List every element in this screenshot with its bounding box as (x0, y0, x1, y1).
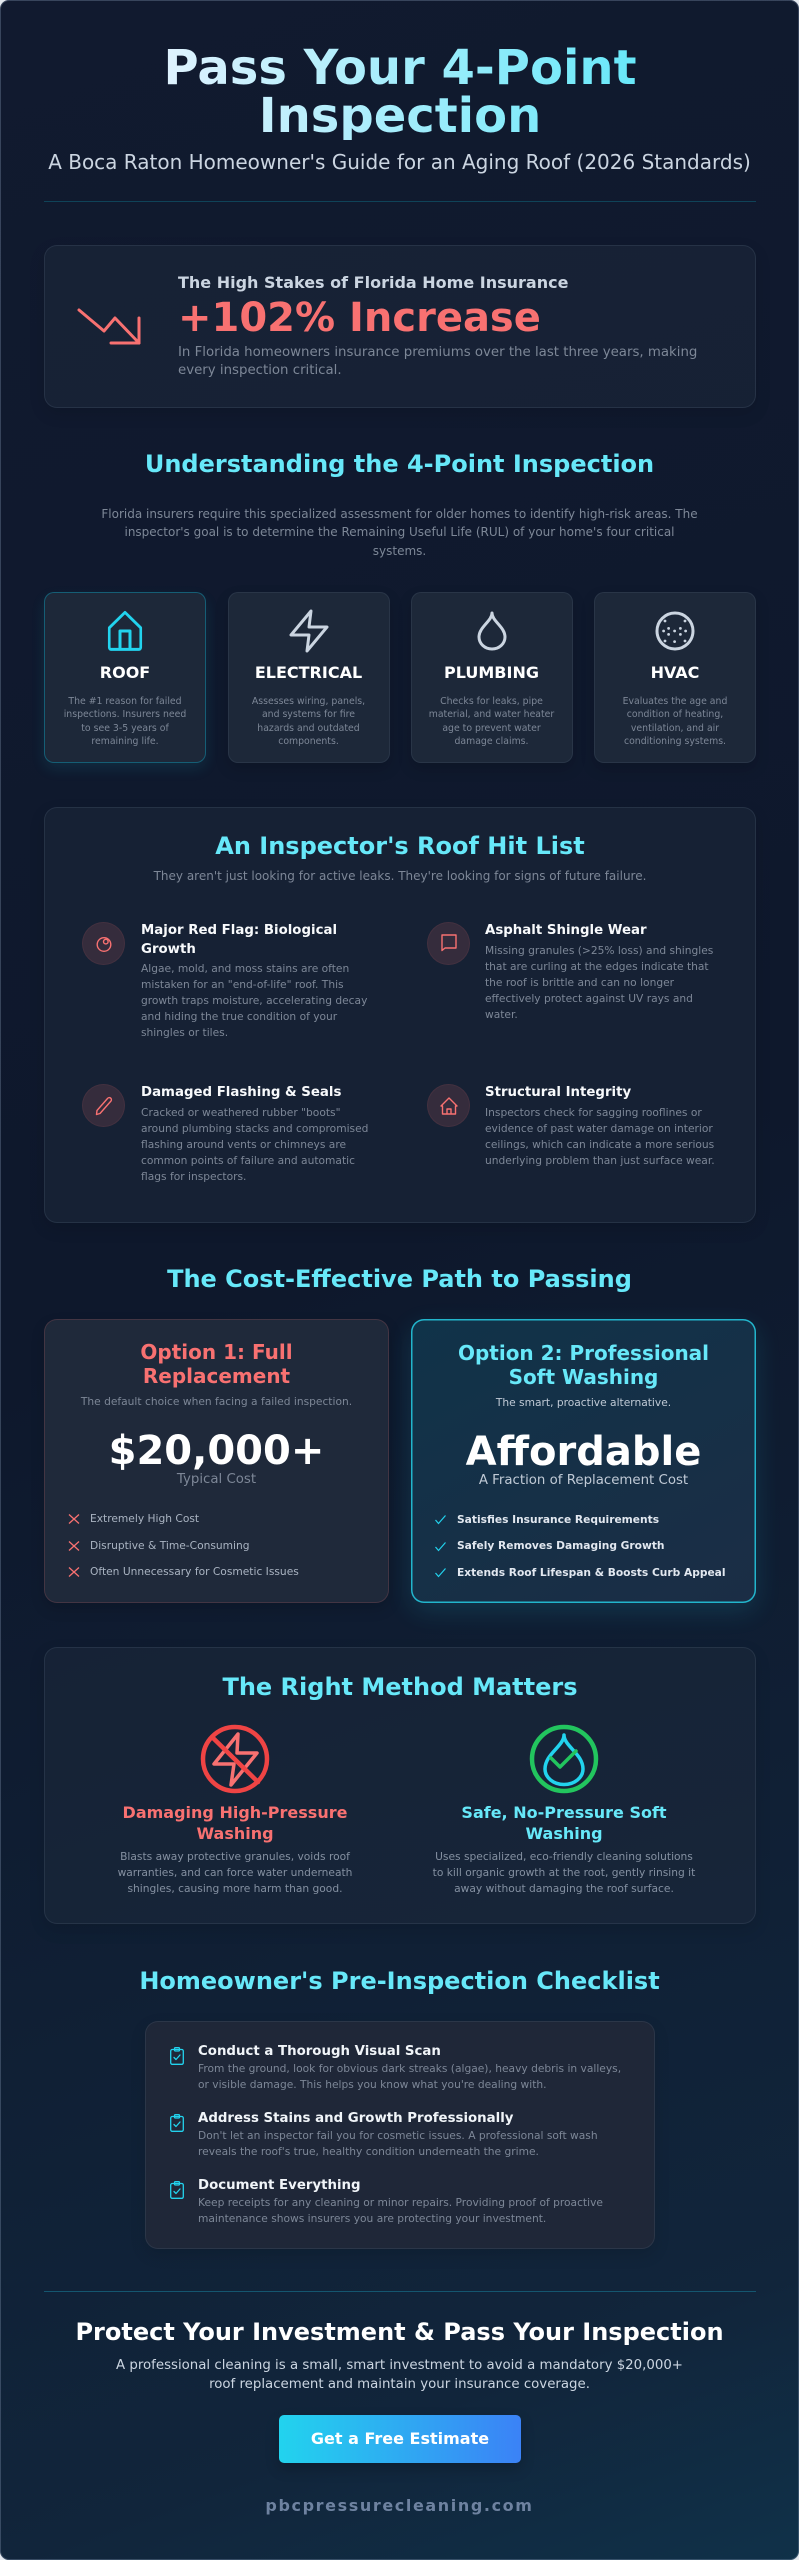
icon: water drop (478, 612, 506, 650)
icon: no high pressure (200, 1724, 270, 1794)
benefit 1: Satisfies Insurance Requirements (457, 1513, 659, 1526)
panel: checklist (144, 2021, 655, 2248)
title: Pass Your 4-Point (163, 40, 637, 96)
price caption: A Fraction of Replacement Cost (479, 1473, 688, 1488)
item description: water. (485, 1008, 518, 1021)
stat number: +102% Increase (178, 295, 541, 341)
item description (141, 1106, 368, 1183)
icon: bolt (289, 610, 329, 652)
option title: Replacement (143, 1364, 290, 1388)
icon: pencil (82, 1084, 125, 1127)
item description (485, 944, 713, 1021)
stat description (178, 345, 697, 378)
item title: Asphalt Shingle Wear (485, 923, 647, 938)
method: high pressure (118, 1724, 352, 1895)
item: flashing and seals (82, 1084, 368, 1183)
option subtitle: The default choice when facing a failed inspection. (81, 1395, 352, 1408)
item description: that are curling at the edges indicate that (485, 960, 709, 973)
icon: clipboard (170, 2047, 184, 2065)
item description (485, 1106, 715, 1167)
list: benefits (435, 1513, 726, 1579)
item description: flashing around vents or chimneys are (141, 1138, 346, 1151)
item description: Cracked or weathered rubber "boots" (141, 1106, 340, 1119)
check description (198, 2195, 603, 2227)
panel: option 1 (44, 1319, 389, 1603)
card: hvac (594, 592, 756, 763)
method title: Safe, No-Pressure Soft (461, 1802, 667, 1822)
benefit 2: Safely Removes Damaging Growth (457, 1539, 665, 1552)
intro paragraph: inspector's goal is to determine the Remaining Useful Life (RUL) of your home's four critical (124, 525, 675, 539)
description (252, 696, 365, 747)
icon: house (108, 610, 142, 651)
description: hazards and outdated (257, 723, 360, 734)
description: remaining life. (91, 736, 159, 747)
panel: right method (44, 1647, 756, 1924)
check description: Keep receipts for any cleaning or minor repairs. Providing proof of proactive (198, 2196, 603, 2209)
item: shingle wear (427, 922, 713, 1021)
item title (141, 923, 337, 957)
method description (432, 1850, 696, 1895)
heading: checklist: Homeowner's Pre-Inspection Checklist (139, 1967, 660, 1995)
closing heading: Protect Your Investment & Pass Your Inspection (75, 2318, 724, 2346)
heading: cost path: The Cost-Effective Path to Passing (167, 1265, 632, 1293)
price: Affordable (466, 1429, 701, 1475)
item description: Inspectors check for sagging rooflines or (485, 1106, 702, 1119)
item title: Major Red Flag: Biological (141, 923, 337, 938)
check title: Address Stains and Growth Professionally (198, 2111, 514, 2126)
check title: Conduct a Thorough Visual Scan (198, 2044, 441, 2059)
method title: Washing (196, 1824, 274, 1843)
heading: An Inspector's Roof Hit List (215, 832, 585, 860)
icon: vent (656, 612, 694, 650)
description: and systems for fire (262, 709, 355, 720)
stat heading: The High Stakes of Florida Home Insurance (178, 272, 568, 292)
method description: Blasts away protective granules, voids roof (120, 1850, 350, 1863)
subheading: They aren't just looking for active leaks. They're looking for signs of future failure. (154, 869, 646, 883)
icon: growth spot (82, 922, 125, 965)
closing text: A professional cleaning is a small, smart investment to avoid a mandatory $20,000+ (116, 2358, 683, 2373)
card: electrical (228, 592, 390, 763)
four system cards (43, 592, 756, 770)
check item 2 (170, 2111, 640, 2161)
title: Inspection (259, 88, 541, 144)
heading: understanding: Understanding the 4-Point Inspection (145, 450, 654, 478)
check description: From the ground, look for obvious dark streaks (algae), heavy debris in valleys, (198, 2062, 621, 2075)
method description (118, 1850, 352, 1895)
check item 1 (170, 2044, 621, 2091)
item title: Structural Integrity (485, 1085, 631, 1100)
downside 3: Often Unnecessary for Cosmetic Issues (90, 1565, 299, 1578)
card: roof (44, 592, 206, 763)
description: The #1 reason for failed (68, 696, 182, 707)
icon: clipboard (170, 2114, 184, 2132)
item description: the roof is brittle and can no longer (485, 976, 674, 989)
item description: effectively protect against UV rays and (485, 992, 693, 1005)
option title: Option 1: Full (140, 1340, 293, 1364)
description: Checks for leaks, pipe (440, 696, 543, 707)
label: PLUMBING (444, 662, 539, 682)
item description: growth traps moisture, accelerating decay (141, 994, 367, 1007)
item description: mistaken for an "end-of-life" roof. This (141, 978, 344, 991)
item title: Damaged Flashing & Seals (141, 1085, 341, 1100)
card: plumbing (410, 592, 572, 763)
check description (198, 2061, 621, 2093)
method description: to kill organic growth at the root, gently rinsing it (433, 1866, 695, 1879)
website footer: pbcpressurecleaning.com (265, 2496, 534, 2514)
label: HVAC (651, 662, 699, 682)
description: inspections. Insurers need (64, 709, 186, 720)
icon: safe drop (530, 1724, 598, 1794)
icon: shingle square (427, 922, 470, 965)
panel: insurance stat (44, 245, 756, 408)
intro paragraph: systems. (373, 544, 426, 558)
closing text (0, 2357, 799, 2394)
item description (141, 962, 367, 1039)
icon: small house (427, 1084, 470, 1127)
item description: shingles or tiles. (141, 1026, 228, 1039)
stat description: every inspection critical. (178, 363, 342, 378)
item description: underlying problem than just surface wear. (485, 1154, 715, 1167)
price: $20,000+ (109, 1428, 324, 1474)
method title: Damaging High-Pressure (123, 1802, 347, 1822)
item description: and hiding the true condition of your (141, 1010, 337, 1023)
description: to see 3-5 years of (81, 723, 169, 734)
label: ROOF (100, 662, 150, 682)
method title (461, 1802, 667, 1843)
description: damage claims. (454, 736, 528, 747)
closing text: roof replacement and maintain your insurance coverage. (209, 2377, 590, 2392)
check description: reveals the roof's true, healthy condition underneath the grime. (198, 2145, 539, 2158)
price caption: Typical Cost (177, 1472, 256, 1487)
check item 3 (170, 2177, 640, 2227)
description: Assesses wiring, panels, (252, 696, 365, 707)
downside 1: Extremely High Cost (90, 1512, 199, 1525)
description: conditioning systems. (624, 736, 726, 747)
option title: Soft Washing (509, 1365, 658, 1389)
method description: shingles, causing more harm than good. (128, 1882, 342, 1895)
downside 2: Disruptive & Time-Consuming (90, 1539, 250, 1552)
method title (123, 1802, 347, 1843)
description: ventilation, and air (631, 723, 719, 734)
item: structural integrity (427, 1084, 715, 1167)
list: downsides (68, 1512, 299, 1578)
panel: option 2 (411, 1319, 756, 1603)
item title: Growth (141, 942, 196, 957)
button: free estimate (279, 2415, 521, 2463)
heading: The Right Method Matters (222, 1673, 578, 1701)
description: condition of heating, (627, 709, 723, 720)
description: Evaluates the age and (623, 696, 727, 707)
check description: maintenance shows insurers you are protecting your investment. (198, 2212, 546, 2225)
option subtitle: The smart, proactive alternative. (496, 1396, 671, 1409)
item description: Missing granules (>25% loss) and shingles (485, 944, 713, 957)
check description: Don't let an inspector fail you for cosmetic issues. A professional soft wash (198, 2129, 598, 2142)
method: soft wash (432, 1724, 696, 1895)
item description: common points of failure and automatic (141, 1154, 355, 1167)
method title: Washing (525, 1824, 603, 1843)
description (429, 696, 554, 747)
intro paragraph (101, 507, 698, 558)
check description: or visible damage. This helps you know what you're dealing with. (198, 2078, 547, 2091)
description: material, and water heater (429, 709, 554, 720)
description (64, 696, 186, 747)
intro paragraph: Florida insurers require this specialized assessment for older homes to identify high-risk areas. The (101, 507, 698, 521)
item description: flags for inspectors. (141, 1170, 246, 1183)
description: components. (278, 736, 339, 747)
check title: Document Everything (198, 2178, 361, 2193)
option title: Option 2: Professional (458, 1341, 709, 1365)
benefit 3: Extends Roof Lifespan & Boosts Curb Appeal (457, 1566, 726, 1579)
item description: ceilings, which can indicate a more serious (485, 1138, 714, 1151)
method description: Uses specialized, eco-friendly cleaning solutions (435, 1850, 693, 1863)
item description: Algae, mold, and moss stains are often (141, 962, 349, 975)
icon: trending down arrow (77, 308, 141, 345)
description (623, 696, 727, 747)
stat description: In Florida homeowners insurance premiums over the last three years, making (178, 345, 697, 360)
option title (140, 1340, 293, 1388)
item description: evidence of past water damage on interior (485, 1122, 713, 1135)
title (160, 44, 640, 140)
method description: away without damaging the roof surface. (454, 1882, 674, 1895)
item: biological growth (82, 922, 367, 1039)
button: free estimate: Get a Free Estimate (311, 2429, 489, 2448)
item description: around plumbing stacks and compromised (141, 1122, 368, 1135)
icon: clipboard (170, 2181, 184, 2199)
label: ELECTRICAL (255, 662, 362, 682)
check description (198, 2128, 598, 2160)
option title (458, 1341, 709, 1389)
method description: warranties, and can force water underneath (118, 1866, 352, 1879)
subtitle: A Boca Raton Homeowner's Guide for an Aging Roof (2026 Standards) (48, 150, 751, 174)
description: age to prevent water (442, 723, 541, 734)
panel: roof hit list (44, 807, 756, 1223)
